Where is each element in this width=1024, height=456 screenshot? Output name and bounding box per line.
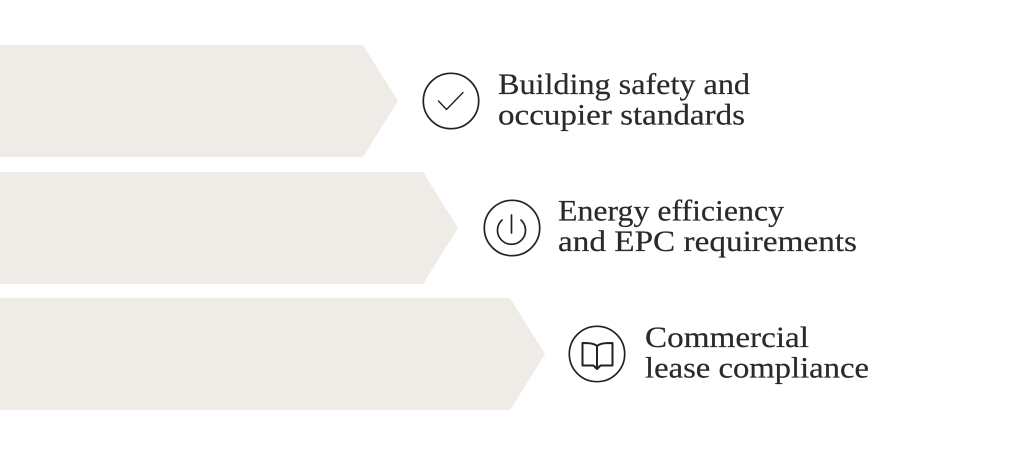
arrow: building safety — [0, 45, 398, 157]
arrow: commercial lease — [0, 298, 545, 410]
text: building safety and occupier standards: Building safety and — [498, 68, 750, 101]
icon: check mark in circle — [423, 73, 479, 129]
text: commercial lease compliance: lease compliance — [645, 352, 869, 384]
text: building safety and occupier standards: occupier standards — [498, 98, 745, 132]
arrow: energy efficiency — [0, 172, 458, 284]
text: energy efficiency and EPC requirements: and EPC requirements — [558, 225, 857, 258]
text: commercial lease compliance: Commercial — [645, 321, 809, 354]
text: energy efficiency and EPC requirements: Energy efficiency — [558, 194, 784, 228]
text: building safety and occupier standards — [498, 68, 750, 132]
text: commercial lease compliance — [645, 321, 869, 384]
icon: open book in circle — [569, 326, 625, 382]
icon: power symbol in circle — [484, 200, 540, 256]
text: energy efficiency and EPC requirements — [558, 194, 857, 258]
